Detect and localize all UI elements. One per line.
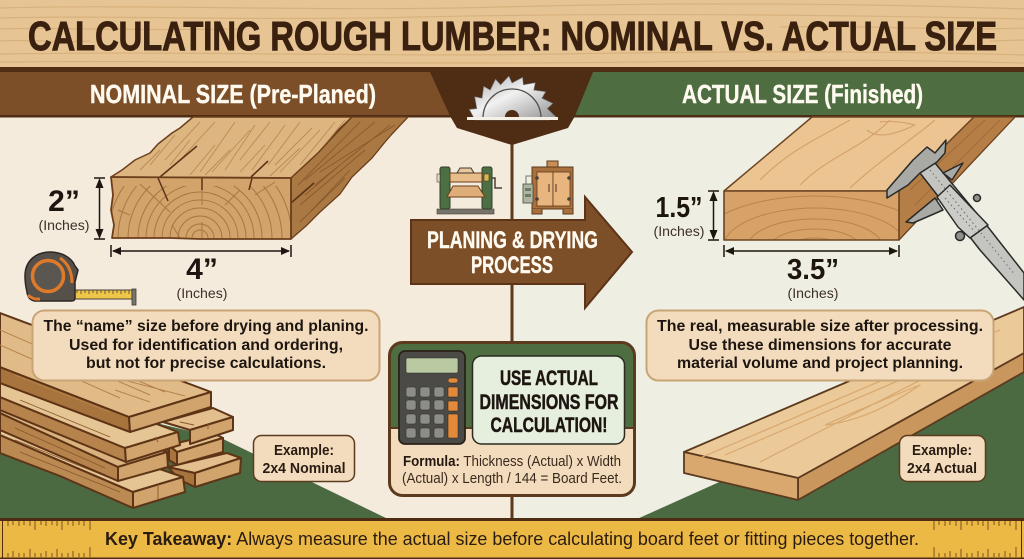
footer ruler banner xyxy=(0,518,1024,559)
callout: use actual dimensions: DIMENSIONS FOR xyxy=(480,390,619,414)
actual heading: ACTUAL SIZE (Finished) xyxy=(682,79,923,109)
centre divider line xyxy=(510,140,514,520)
dimension: 4 inches xyxy=(111,245,291,301)
callout: nominal description: but not for precise calculations. xyxy=(86,355,326,372)
dimension: 2 inches: 2” xyxy=(48,185,80,218)
banner: actual size xyxy=(574,72,1024,118)
example label: actual xyxy=(900,436,986,482)
process label: PROCESS xyxy=(471,252,553,279)
dimension: 3.5 inches xyxy=(724,245,899,301)
calculation panel xyxy=(390,342,634,496)
example label: nominal: Example: xyxy=(274,443,334,459)
rough board xyxy=(110,116,408,240)
process label: PLANING & DRYING xyxy=(427,227,598,254)
upper middle board xyxy=(0,383,180,462)
icon: tape measure xyxy=(25,252,136,305)
icon: planer machine xyxy=(437,167,502,214)
process arrow xyxy=(411,197,632,308)
nominal heading: NOMINAL SIZE (Pre-Planed) xyxy=(90,79,376,109)
saw badge xyxy=(430,72,593,145)
long finished board xyxy=(684,307,1024,500)
callout: nominal description xyxy=(32,310,380,380)
callout: actual description: The real, measurable size after processing. xyxy=(657,318,983,335)
key takeaway text: Key Takeaway: Always measure the actual size before calculating board feet or fitting pieces together. xyxy=(105,528,919,549)
planed board xyxy=(723,116,1016,241)
dimension: 4 inches: (Inches) xyxy=(176,286,228,301)
lower middle board xyxy=(0,405,168,481)
example label: nominal: 2x4 Nominal xyxy=(262,461,346,477)
right middle board xyxy=(169,434,223,465)
callout: use actual dimensions xyxy=(472,356,624,444)
top board xyxy=(0,313,211,432)
icon: vernier caliper xyxy=(887,140,1024,300)
header wood plank xyxy=(0,0,1024,72)
formula text: Formula: Thickness (Actual) x Width xyxy=(403,454,621,470)
icon: circular saw blade xyxy=(467,76,558,120)
right lower board xyxy=(168,453,241,487)
green ground left xyxy=(0,400,388,519)
dimension: 2 inches: (Inches) xyxy=(38,218,90,233)
example label: actual: Example: xyxy=(912,443,972,459)
dimension: 1.5 inches: 1.5” xyxy=(656,192,702,224)
callout: nominal description: Used for identification and ordering, xyxy=(69,337,343,354)
banner: nominal size xyxy=(0,72,452,118)
callout: nominal description: The “name” size before drying and planing. xyxy=(44,318,368,335)
formula text xyxy=(402,454,622,487)
bottom board xyxy=(0,425,185,508)
dimension: 1.5 inches: (Inches) xyxy=(654,224,704,239)
green ground right xyxy=(637,345,1024,519)
dimension: 1.5 inches xyxy=(654,191,719,240)
callout: actual description xyxy=(646,310,994,380)
dimension: 3.5 inches: (Inches) xyxy=(788,286,838,301)
formula text: (Actual) x Length / 144 = Board Feet. xyxy=(402,471,622,487)
callout: actual description: Use these dimensions for accurate xyxy=(688,337,952,354)
left panel background xyxy=(0,116,512,519)
right upper board xyxy=(163,408,233,444)
lumber stack xyxy=(0,313,241,508)
right panel background xyxy=(512,116,1024,519)
icon: drying kiln xyxy=(523,161,573,214)
process label xyxy=(427,227,598,279)
callout: use actual dimensions: CALCULATION! xyxy=(490,413,608,437)
dimension: 2 inches xyxy=(38,178,105,239)
example label: actual: 2x4 Actual xyxy=(907,461,977,477)
callout: actual description: material volume and project planning. xyxy=(677,355,963,372)
dimension: 3.5 inches: 3.5” xyxy=(787,254,839,286)
dimension: 4 inches: 4” xyxy=(186,253,218,286)
callout: use actual dimensions: USE ACTUAL xyxy=(500,366,598,390)
icon: calculator xyxy=(399,351,465,444)
example label: nominal xyxy=(254,436,354,482)
